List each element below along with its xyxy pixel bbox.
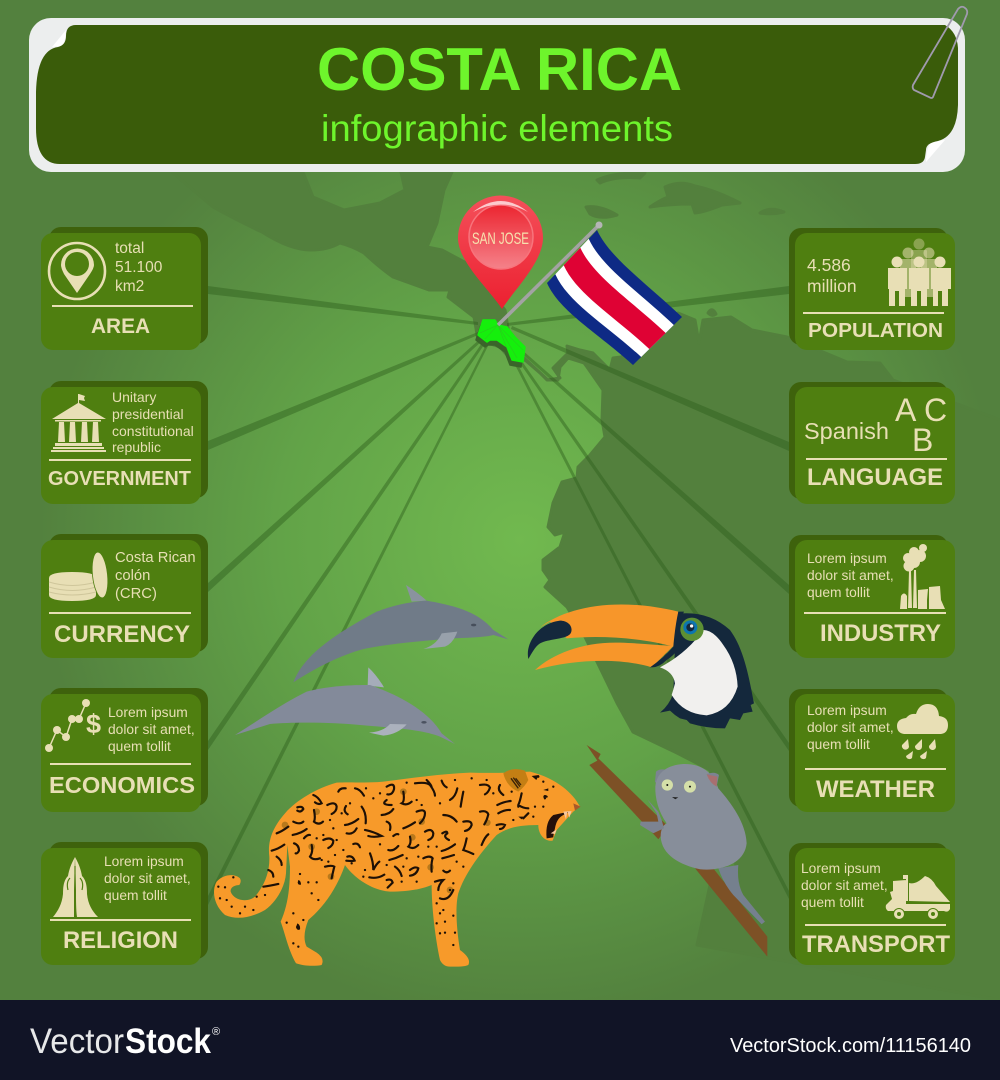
icon: crowd of people bbox=[888, 238, 951, 306]
panel: population bbox=[789, 228, 955, 350]
footer band: Stock bbox=[125, 1022, 211, 1061]
language text: Spanish bbox=[804, 418, 889, 444]
transport text: quem tollit bbox=[801, 895, 864, 910]
rays connecting panels to the country bbox=[208, 286, 789, 905]
icon: growth chart and dollar bbox=[45, 699, 101, 752]
title banner bbox=[29, 7, 967, 172]
dolphin: upper bbox=[293, 585, 508, 682]
subtitle: infographic elements bbox=[321, 107, 673, 149]
jaguar rosettes bbox=[263, 780, 547, 899]
weather label: WEATHER bbox=[816, 776, 935, 803]
panel: government bbox=[41, 381, 208, 504]
map pin: San Jose bbox=[458, 196, 543, 309]
panel: currency bbox=[41, 534, 208, 658]
icon: government building bbox=[51, 394, 106, 452]
map: Central and South America bbox=[172, 172, 1000, 1000]
VectorStock logo: Vector bbox=[30, 1022, 124, 1061]
currency text: colón bbox=[115, 568, 150, 584]
flag of Costa Rica on pole bbox=[498, 222, 682, 365]
religion text: dolor sit amet, bbox=[104, 871, 191, 886]
icon: map pin in circle bbox=[49, 243, 105, 299]
economics text: quem tollit bbox=[108, 739, 171, 754]
tail bbox=[718, 865, 765, 924]
title text: COSTA RICA bbox=[317, 36, 682, 103]
government text: presidential bbox=[112, 406, 184, 422]
industry label: INDUSTRY bbox=[820, 620, 941, 647]
jaguar bbox=[214, 769, 581, 967]
religion label: RELIGION bbox=[63, 927, 178, 954]
dolphin: lower bbox=[235, 667, 455, 744]
economics text: Lorem ipsum bbox=[108, 705, 188, 720]
jaguar small spots bbox=[218, 777, 553, 947]
map: Costa Rica bbox=[476, 320, 525, 367]
panel: language bbox=[789, 382, 955, 504]
icon: factory bbox=[900, 544, 945, 609]
panel: industry bbox=[789, 535, 955, 658]
toucan bbox=[528, 604, 754, 728]
industry text: Lorem ipsum bbox=[807, 551, 887, 566]
government text: Unitary bbox=[112, 389, 156, 405]
transport label: TRANSPORT bbox=[802, 931, 950, 958]
transport text: dolor sit amet, bbox=[801, 878, 888, 893]
arm bbox=[640, 799, 664, 833]
San Jose label: SAN JOSE bbox=[472, 229, 529, 248]
image id: VectorStock.com/11156140 bbox=[730, 1035, 971, 1057]
dolphins bbox=[235, 585, 508, 744]
branch bbox=[587, 745, 767, 957]
economics label: ECONOMICS bbox=[49, 772, 195, 798]
jaguar brown patches bbox=[282, 788, 491, 893]
government text: republic bbox=[112, 439, 161, 455]
panel: weather bbox=[789, 689, 955, 812]
jaguar mouth bbox=[546, 803, 581, 838]
population text: million bbox=[807, 276, 857, 296]
panel: area bbox=[41, 227, 208, 350]
footer band bbox=[0, 1000, 1000, 1080]
icon: paper clip bbox=[913, 7, 967, 98]
icon: ABC letters: B bbox=[912, 422, 933, 458]
tarsier on branch bbox=[587, 745, 767, 957]
icon: ABC letters: A bbox=[895, 392, 917, 428]
currency text: Costa Rican bbox=[115, 550, 196, 566]
area text: km2 bbox=[115, 278, 144, 295]
religion text: Lorem ipsum bbox=[104, 854, 184, 869]
footer band: ® bbox=[212, 1026, 220, 1038]
ear bbox=[707, 773, 719, 787]
icon: dump truck bbox=[886, 875, 950, 920]
economics text: dolor sit amet, bbox=[108, 722, 195, 737]
icon: growth chart and dollar: $ bbox=[86, 709, 101, 739]
weather text: Lorem ipsum bbox=[807, 703, 887, 718]
currency label: CURRENCY bbox=[54, 621, 190, 648]
industry text: dolor sit amet, bbox=[807, 568, 894, 583]
population label: POPULATION bbox=[808, 319, 943, 342]
area text: 51.100 bbox=[115, 259, 163, 276]
icon: ABC letters: C bbox=[924, 392, 947, 428]
language label: LANGUAGE bbox=[807, 464, 943, 491]
industry text: quem tollit bbox=[807, 585, 870, 600]
icon: praying hands bbox=[53, 857, 98, 917]
government label: GOVERNMENT bbox=[48, 468, 191, 490]
panel: religion bbox=[41, 842, 208, 965]
area text: total bbox=[115, 240, 144, 257]
population text: 4.586 bbox=[807, 255, 851, 275]
icon: rain cloud bbox=[897, 704, 948, 759]
panel: transport bbox=[789, 843, 955, 965]
panel: economics bbox=[41, 688, 208, 812]
weather text: quem tollit bbox=[807, 737, 870, 752]
icon: coins bbox=[49, 551, 110, 601]
government text: constitutional bbox=[112, 423, 194, 439]
religion text: quem tollit bbox=[104, 888, 167, 903]
eyes bbox=[662, 779, 696, 793]
weather text: dolor sit amet, bbox=[807, 720, 894, 735]
transport text: Lorem ipsum bbox=[801, 861, 881, 876]
area label: AREA bbox=[91, 315, 150, 338]
currency text: (CRC) bbox=[115, 586, 157, 602]
jaguar ear bbox=[503, 769, 528, 792]
